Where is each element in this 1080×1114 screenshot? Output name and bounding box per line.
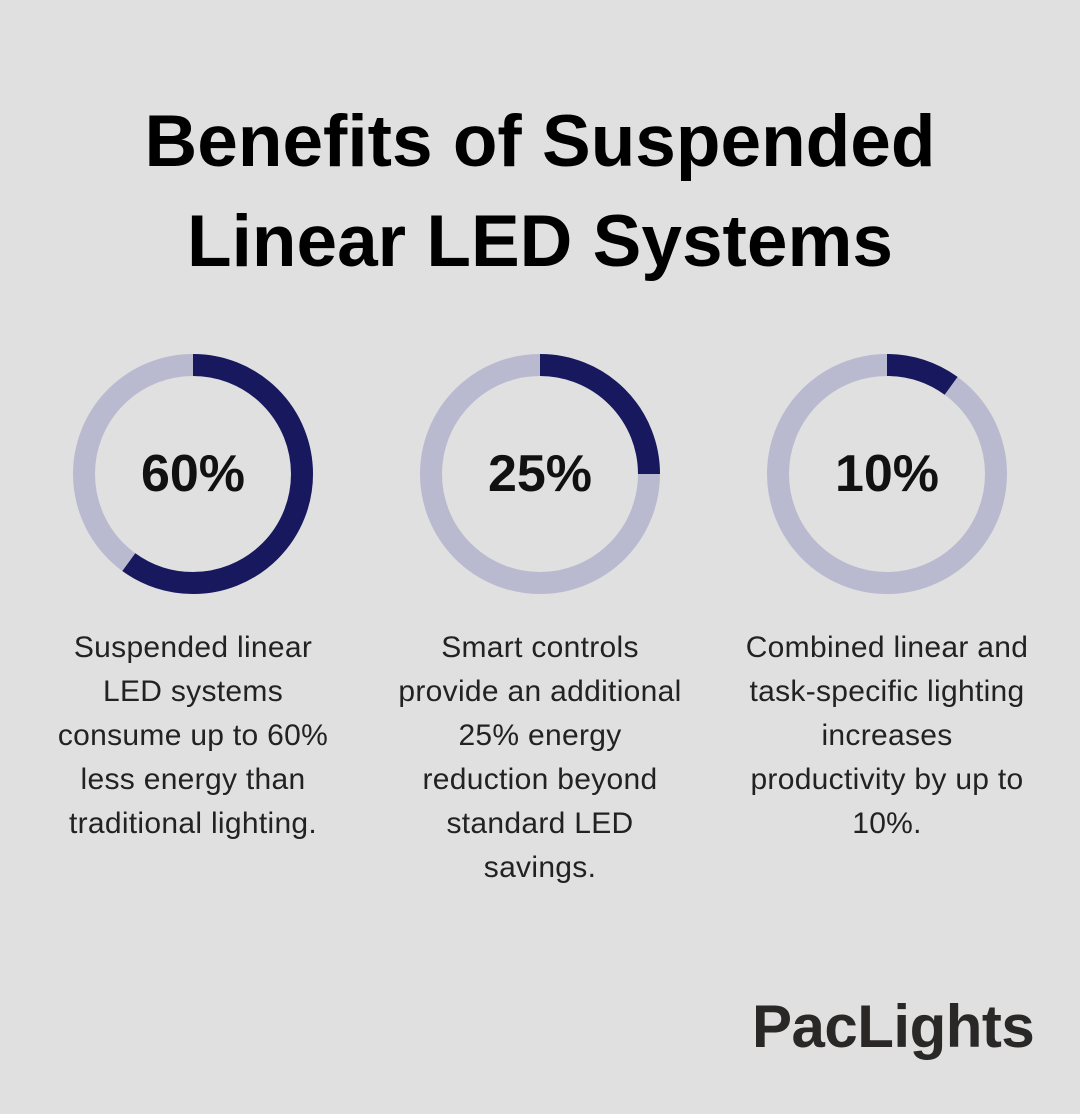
title: Linear LED Systems [187,201,893,282]
description 1: Suspended linear [74,631,312,664]
description 1: consume up to 60% [58,719,328,752]
stat: 10% donut [767,354,1007,594]
description 1: less energy than [81,763,305,796]
description 2: savings. [484,851,596,884]
description 2: provide an additional [398,675,682,708]
description 2 [398,631,682,884]
stat: 10% donut: 10% [835,445,939,503]
stat: 60% donut: 60% [141,445,245,503]
description 3: 10%. [852,807,922,840]
description 1: LED systems [103,675,283,708]
description 3: increases [821,719,953,752]
description 3: task-specific lighting [749,675,1025,708]
stat: 60% donut [73,354,313,594]
description 2: standard LED [446,807,634,840]
logo: PacLights [752,993,1034,1060]
title [145,101,935,282]
description 2: reduction beyond [422,763,657,796]
description 2: 25% energy [458,719,622,752]
description 3 [746,631,1028,840]
description 3: productivity by up to [750,763,1024,796]
description 1 [58,631,328,840]
stat: 25% donut [420,354,660,594]
description 2: Smart controls [441,631,639,664]
description 3: Combined linear and [746,631,1028,664]
stat: 25% donut: 25% [488,445,592,503]
title: Benefits of Suspended [145,101,935,182]
description 1: traditional lighting. [69,807,317,840]
